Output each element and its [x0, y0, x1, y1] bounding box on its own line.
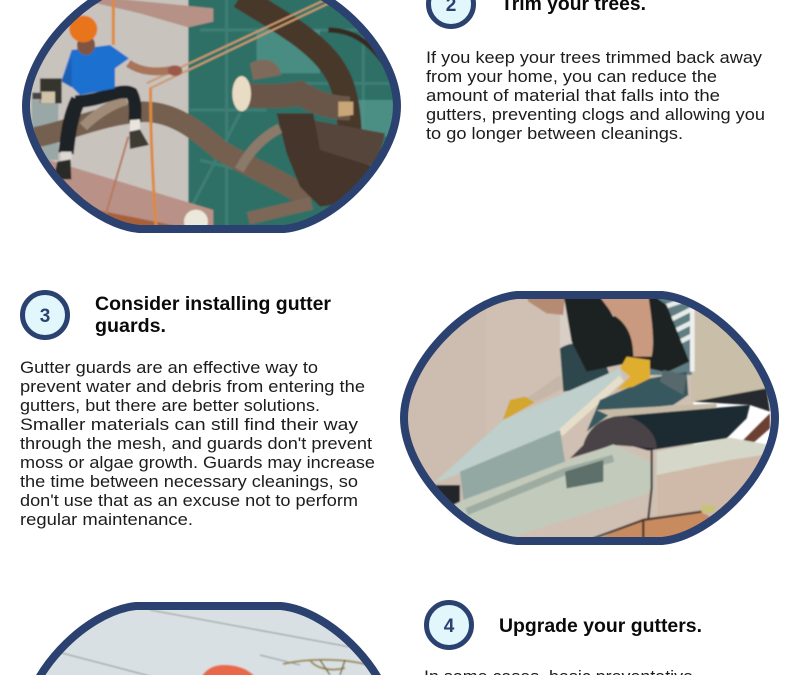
text block: trim your trees: amount of material that falls into the [426, 86, 720, 105]
text block: trim your trees: gutters, preventing clogs and allowing you [426, 105, 765, 124]
text block: gutter guards: through the mesh, and guards don't prevent [20, 434, 372, 453]
heading: consider installing gutter guards [95, 294, 332, 337]
heading: consider installing gutter guards: guards. [95, 316, 166, 337]
number 4: 4 [444, 616, 455, 637]
step 3 badge [22, 292, 68, 338]
step 2 badge [428, 0, 474, 26]
text block: gutter guards: regular maintenance. [20, 510, 193, 529]
number 3: 3 [40, 306, 50, 327]
text block: gutter guards: Gutter guards are an effective way to [20, 358, 318, 377]
heading: upgrade your gutters: Upgrade your gutters. [499, 616, 702, 637]
text block: gutter guards: moss or algae growth. Guards may increase [20, 453, 375, 472]
text block: gutter guards: the time between necessary cleanings, so [20, 472, 358, 491]
panel: tree trimming photo [22, 0, 401, 233]
text block: gutter guards [20, 358, 375, 529]
text block: trim your trees [426, 48, 765, 143]
text block: trim your trees: to go longer between cleanings. [426, 124, 683, 143]
text block: gutter guards: gutters, but there are better solutions. [20, 396, 320, 415]
text block: gutter guards: don't use that as an excuse not to perform [20, 491, 358, 510]
step 4 badge [426, 602, 472, 648]
text block: gutter guards: Smaller materials can still find their way [20, 415, 359, 434]
panel: gutter guard installation photo [400, 285, 782, 552]
panel: gutter upgrade photo [36, 602, 381, 675]
text block: gutter guards: prevent water and debris from entering the [20, 377, 365, 396]
text block: trim your trees: from your home, you can reduce the [426, 67, 717, 86]
text block: trim your trees: If you keep your trees trimmed back away [426, 48, 763, 67]
heading: consider installing gutter guards: Consider installing gutter [95, 294, 332, 315]
